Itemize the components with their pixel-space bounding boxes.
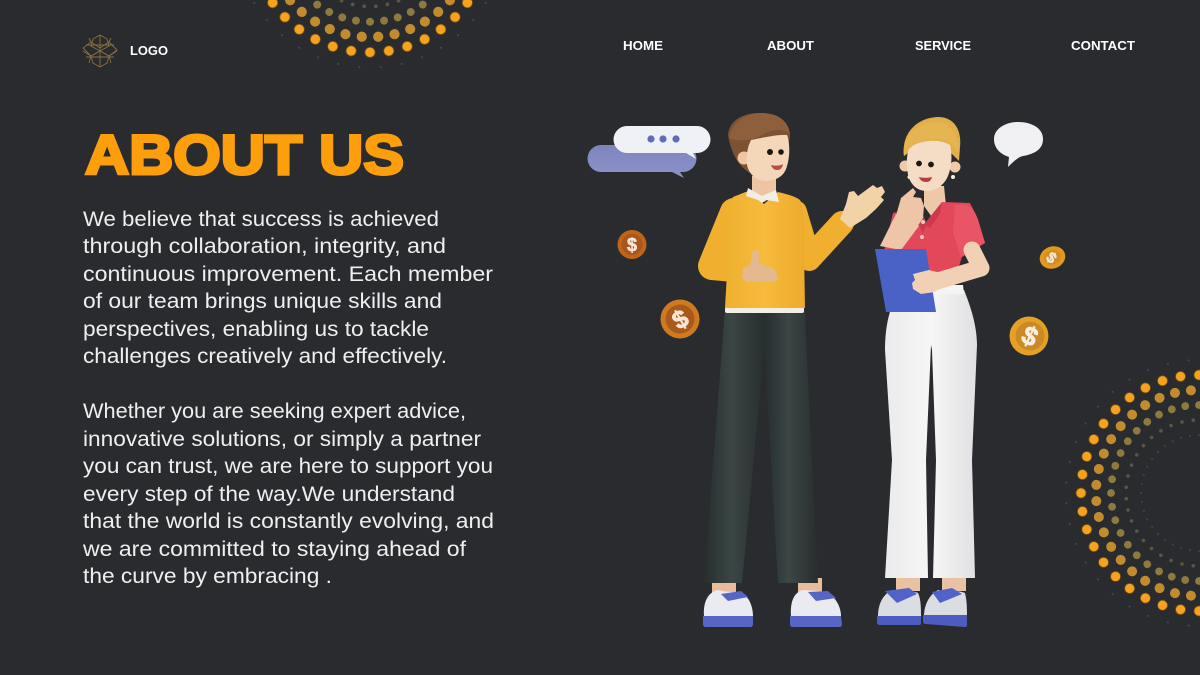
woman: clipboard [875, 249, 936, 312]
text block: first paragraph [83, 208, 493, 368]
halftone dots: right arc [1065, 359, 1200, 627]
text block: first paragraph: through collaboration, integrity, and [83, 235, 446, 258]
speech bubble: right [994, 122, 1043, 167]
icon: coin left large: $ [667, 304, 694, 335]
text block: first paragraph: challenges creatively and effectively. [83, 345, 447, 368]
title: ABOUT US [85, 123, 404, 186]
text block: second paragraph: innovative solutions, or simply a partner [83, 428, 481, 451]
woman figure [875, 117, 985, 627]
man: left shoe [703, 590, 753, 627]
man: collar [746, 188, 779, 203]
man: front hand [742, 250, 778, 282]
woman: trousers [885, 290, 977, 578]
woman: hair front [904, 122, 959, 156]
woman: eyes and mouth [916, 161, 934, 182]
man: right shoe [790, 590, 842, 627]
woman: right shoe [923, 588, 967, 627]
white bubble with dots [614, 126, 710, 159]
woman: raised arm [880, 214, 919, 250]
woman: face [907, 141, 951, 191]
text block: first paragraph: continuous improvement. Each member [83, 263, 493, 286]
man: hair front [729, 113, 790, 140]
text block: second paragraph: that the world is constantly evolving, and [83, 510, 494, 533]
icon: coin right large [1010, 316, 1048, 356]
man: ankles [712, 578, 822, 594]
woman: hair and bun [904, 117, 960, 161]
icon: coin left small: $ [627, 235, 637, 255]
woman: collar and buttons [917, 202, 942, 239]
text block: first paragraph: We believe that success is achieved [83, 208, 439, 231]
woman: ears and earrings [900, 160, 960, 179]
text block: second paragraph: you can trust, we are here to support you [83, 455, 493, 478]
icon: coin left small [618, 230, 646, 259]
man: trousers [704, 310, 818, 583]
icon: coin left large [660, 300, 700, 338]
man: sweater arms [712, 212, 842, 269]
man: neck [752, 176, 776, 202]
logo [83, 35, 168, 67]
woman: holding hand [912, 270, 943, 294]
halftone dots: top arc [251, 0, 489, 69]
woman: raised hand [896, 188, 924, 232]
man: eyes and mouth [767, 149, 784, 170]
navigation [623, 38, 1135, 53]
woman: back arm [931, 250, 981, 283]
navigation: HOME [623, 38, 663, 53]
navigation: CONTACT [1071, 38, 1135, 53]
text block: first paragraph: of our team brings unique skills and [83, 290, 442, 313]
speech bubbles: chat [588, 126, 710, 178]
woman: neck [924, 186, 946, 220]
man figure [703, 113, 885, 627]
text block: second paragraph: Whether you are seeking expert advice, [83, 400, 466, 423]
text block: first paragraph: perspectives, enabling us to tackle [83, 318, 429, 341]
text block: second paragraph [82, 400, 494, 588]
purple bubble [588, 145, 696, 178]
text block: second paragraph: every step of the way.We understand [83, 483, 455, 506]
icon: coin right small: $ [1042, 249, 1060, 268]
icon: coin right small [1037, 243, 1068, 272]
man: raised hand [840, 185, 885, 228]
text block: second paragraph: we are committed to staying ahead of [82, 538, 466, 561]
woman: sleeve [953, 204, 985, 257]
man: ear [738, 152, 750, 164]
man: hair back [728, 113, 790, 173]
icon: logo mesh [83, 35, 117, 67]
woman: left shoe [877, 588, 921, 625]
navigation: ABOUT [767, 38, 814, 53]
woman: shirt [881, 202, 985, 274]
man: face [747, 135, 789, 181]
woman: ankles [896, 575, 966, 591]
logo label: LOGO [130, 43, 168, 58]
woman: waistband [932, 285, 964, 294]
text block: second paragraph: the curve by embracing . [83, 565, 332, 588]
icon: coin right large: $ [1017, 319, 1043, 353]
man: sweater [725, 191, 805, 308]
navigation: SERVICE [915, 38, 971, 53]
man: shirt hem [725, 307, 804, 313]
